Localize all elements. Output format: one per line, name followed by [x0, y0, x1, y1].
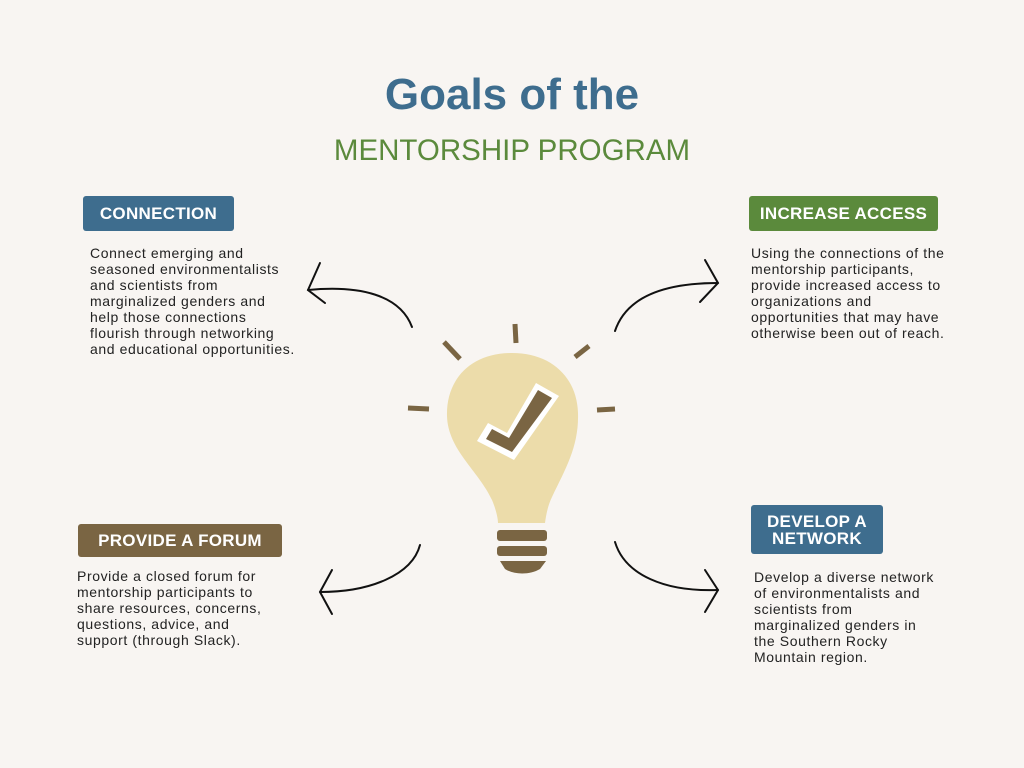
- text: develop a network: the Southern Rocky: [754, 633, 888, 649]
- text: connection: [90, 245, 295, 357]
- text: increase access: provide increased access to: [751, 277, 941, 293]
- text: increase access: opportunities that may have: [751, 309, 939, 325]
- text: connection: and educational opportunities.: [90, 341, 295, 357]
- text: connection: and scientists from: [90, 277, 218, 293]
- text: connection: Connect emerging and: [90, 245, 244, 261]
- text: connection: flourish through networking: [90, 325, 274, 341]
- label: develop a network: NETWORK: [772, 529, 862, 548]
- text: increase access: Using the connections of the: [751, 245, 944, 261]
- title: Goals of the: [385, 70, 639, 119]
- text: increase access: otherwise been out of reach.: [751, 325, 944, 341]
- text: develop a network: Mountain region.: [754, 649, 868, 665]
- text: develop a network: scientists from: [754, 601, 852, 617]
- icon: light bulb: [408, 324, 615, 574]
- arrow: top-left: [308, 263, 412, 327]
- subtitle: MENTORSHIP PROGRAM: [334, 134, 690, 167]
- text: connection: seasoned environmentalists: [90, 261, 279, 277]
- text: increase access: organizations and: [751, 293, 872, 309]
- label: provide a forum: PROVIDE A FORUM: [98, 531, 262, 550]
- label: increase access: INCREASE ACCESS: [760, 204, 927, 223]
- label: increase access: [749, 196, 938, 231]
- text: connection: marginalized genders and: [90, 293, 266, 309]
- text: develop a network: [754, 569, 934, 665]
- text: increase access: mentorship participants,: [751, 261, 914, 277]
- text: provide a forum: share resources, concerns,: [77, 600, 261, 616]
- label: provide a forum: [78, 524, 282, 557]
- text: develop a network: marginalized genders in: [754, 617, 916, 633]
- text: provide a forum: mentorship participants to: [77, 584, 253, 600]
- text: develop a network: Develop a diverse network: [754, 569, 934, 585]
- arrow: top-right: [615, 260, 718, 331]
- text: provide a forum: Provide a closed forum for: [77, 568, 256, 584]
- arrow: bottom-right: [615, 542, 718, 612]
- label: develop a network: [751, 505, 883, 554]
- label: connection: [83, 196, 234, 231]
- text: connection: help those connections: [90, 309, 246, 325]
- text: increase access: [751, 245, 944, 341]
- text: provide a forum: questions, advice, and: [77, 616, 230, 632]
- text: provide a forum: support (through Slack).: [77, 632, 241, 648]
- text: develop a network: of environmentalists and: [754, 585, 920, 601]
- label: develop a network: DEVELOP A: [767, 512, 867, 531]
- label: connection: CONNECTION: [100, 204, 217, 223]
- text: provide a forum: [77, 568, 261, 648]
- arrow: bottom-left: [320, 545, 420, 614]
